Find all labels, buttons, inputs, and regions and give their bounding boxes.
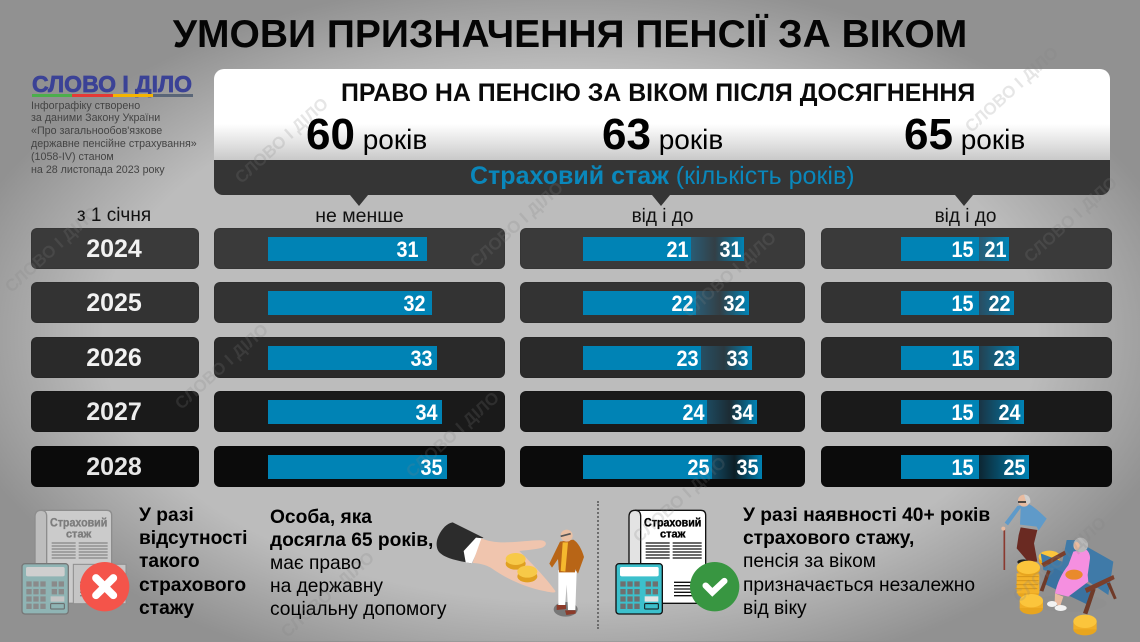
row 2026: 2026	[86, 344, 142, 372]
watermarks: СЛОВО І ДІЛО	[1009, 513, 1110, 606]
watermarks: СЛОВО І ДІЛО	[629, 453, 730, 546]
row 2027: 24	[998, 400, 1020, 425]
text: absence of record: відсутності	[139, 528, 247, 549]
source note: за даними Закону України	[31, 112, 160, 124]
title: УМОВИ ПРИЗНАЧЕННЯ ПЕНСІЇ ЗА ВІКОМ	[173, 13, 967, 56]
row 2024: 21	[666, 237, 688, 262]
text: person aged 65: досягла 65 років,	[270, 530, 433, 551]
row 2028: 15	[951, 455, 973, 480]
row 2027: 2027	[86, 398, 142, 426]
watermarks: СЛОВО І ДІЛО	[277, 548, 378, 641]
watermarks: СЛОВО І ДІЛО	[466, 178, 567, 271]
row 2025: 15	[951, 291, 973, 316]
row 2026	[31, 337, 1112, 378]
icon: faded insurance document with calculator and cross	[21, 510, 130, 614]
text: 40+ years of record	[743, 505, 990, 619]
pointer triangles	[350, 195, 973, 206]
icon: insurance document with calculator and check: Страховий	[644, 517, 702, 530]
row 2027: 34	[731, 400, 753, 425]
text: person aged 65: соціальну допомогу	[270, 599, 447, 620]
column heading: from and to (65): від і до	[935, 206, 996, 227]
watermarks: СЛОВО І ДІЛО	[961, 43, 1062, 136]
icon: faded insurance document with calculator and cross: стаж	[66, 528, 92, 540]
row 2024: 15	[951, 237, 973, 262]
column heading: at least: не менше	[315, 205, 404, 227]
text: absence of record	[139, 505, 247, 619]
text: person aged 65: на державну	[270, 576, 383, 597]
row 2024	[31, 228, 1112, 269]
row 2026: 33	[410, 346, 432, 371]
source note: Інфографіку створено	[31, 100, 140, 112]
text: 40+ years of record: пенсія за віком	[743, 551, 876, 572]
watermarks: СЛОВО І ДІЛО	[1020, 173, 1121, 266]
icon: insurance document with calculator and check: стаж	[660, 528, 686, 540]
age 60: 60 років	[306, 110, 427, 159]
row 2024: 31	[396, 237, 418, 262]
row 2025: 22	[988, 291, 1010, 316]
row 2025: 32	[723, 291, 745, 316]
source note: на 28 листопада 2023 року	[31, 164, 165, 176]
column heading: from and to (63): від і до	[632, 206, 693, 227]
age 63: 63 років	[602, 110, 723, 159]
icon: hand with coins and old man	[436, 522, 584, 617]
dotted divider	[597, 501, 599, 629]
source note: (1058-IV) станом	[31, 151, 114, 163]
text: 40+ years of record: від віку	[743, 598, 807, 619]
row 2026: 15	[951, 346, 973, 371]
header heading: ПРАВО НА ПЕНСІЮ ЗА ВІКОМ ПІСЛЯ ДОСЯГНЕННЯ	[341, 79, 975, 107]
text: person aged 65	[270, 506, 447, 620]
text: 40+ years of record: страхового стажу,	[743, 528, 914, 549]
row 2026: 23	[676, 346, 698, 371]
row 2028: 2028	[86, 453, 142, 481]
row 2025: 2025	[86, 289, 142, 317]
watermarks: СЛОВО І ДІЛО	[1, 203, 102, 296]
row 2026: 33	[726, 346, 748, 371]
insurance record label: Страховий стаж (кількість років)	[470, 162, 855, 190]
row 2025	[31, 282, 1112, 323]
row 2025: 22	[671, 291, 693, 316]
header white background	[214, 69, 1110, 160]
row 2024: 21	[984, 237, 1006, 262]
row 2028: 25	[1003, 455, 1025, 480]
row 2028: 25	[687, 455, 709, 480]
text: absence of record: такого	[139, 551, 200, 572]
watermarks: СЛОВО І ДІЛО	[171, 320, 272, 413]
watermarks: СЛОВО І ДІЛО	[231, 94, 332, 187]
icon: insurance document with calculator and check	[615, 510, 740, 615]
row 2028	[31, 446, 1112, 487]
row 2026: 23	[993, 346, 1015, 371]
row 2027: 24	[682, 400, 704, 425]
text: 40+ years of record: призначається незалежно	[743, 575, 975, 596]
watermarks: СЛОВО І ДІЛО	[679, 228, 780, 321]
text: absence of record: У разі	[139, 505, 194, 526]
text: absence of record: страхового	[139, 575, 246, 596]
row 2028: 35	[420, 455, 442, 480]
row 2024: 31	[719, 237, 741, 262]
text: 40+ years of record: У разі наявності 40+ років	[743, 505, 990, 526]
icon: elderly couple on a bench with coins	[1001, 494, 1117, 636]
text: absence of record: стажу	[139, 598, 194, 619]
row 2025: 32	[403, 291, 425, 316]
row 2027: 34	[415, 400, 437, 425]
panel: pension age header	[214, 69, 1110, 206]
row 2024: 2024	[86, 235, 142, 263]
row 2028: 35	[736, 455, 758, 480]
source note: державне пенсійне страхування»	[31, 138, 197, 150]
source note	[31, 100, 197, 176]
icon: faded insurance document with calculator and cross: Страховий	[50, 517, 107, 530]
source note: «Про загальнообов'язкове	[31, 125, 162, 137]
age 65: 65 років	[904, 110, 1025, 159]
text: person aged 65: Особа, яка	[270, 506, 372, 528]
row 2027	[31, 391, 1112, 432]
column heading: from January 1: з 1 січня	[77, 205, 151, 226]
row 2027: 15	[951, 400, 973, 425]
header dark band	[214, 160, 1110, 195]
text: person aged 65: має право	[270, 553, 361, 574]
watermarks: СЛОВО І ДІЛО	[402, 388, 503, 481]
